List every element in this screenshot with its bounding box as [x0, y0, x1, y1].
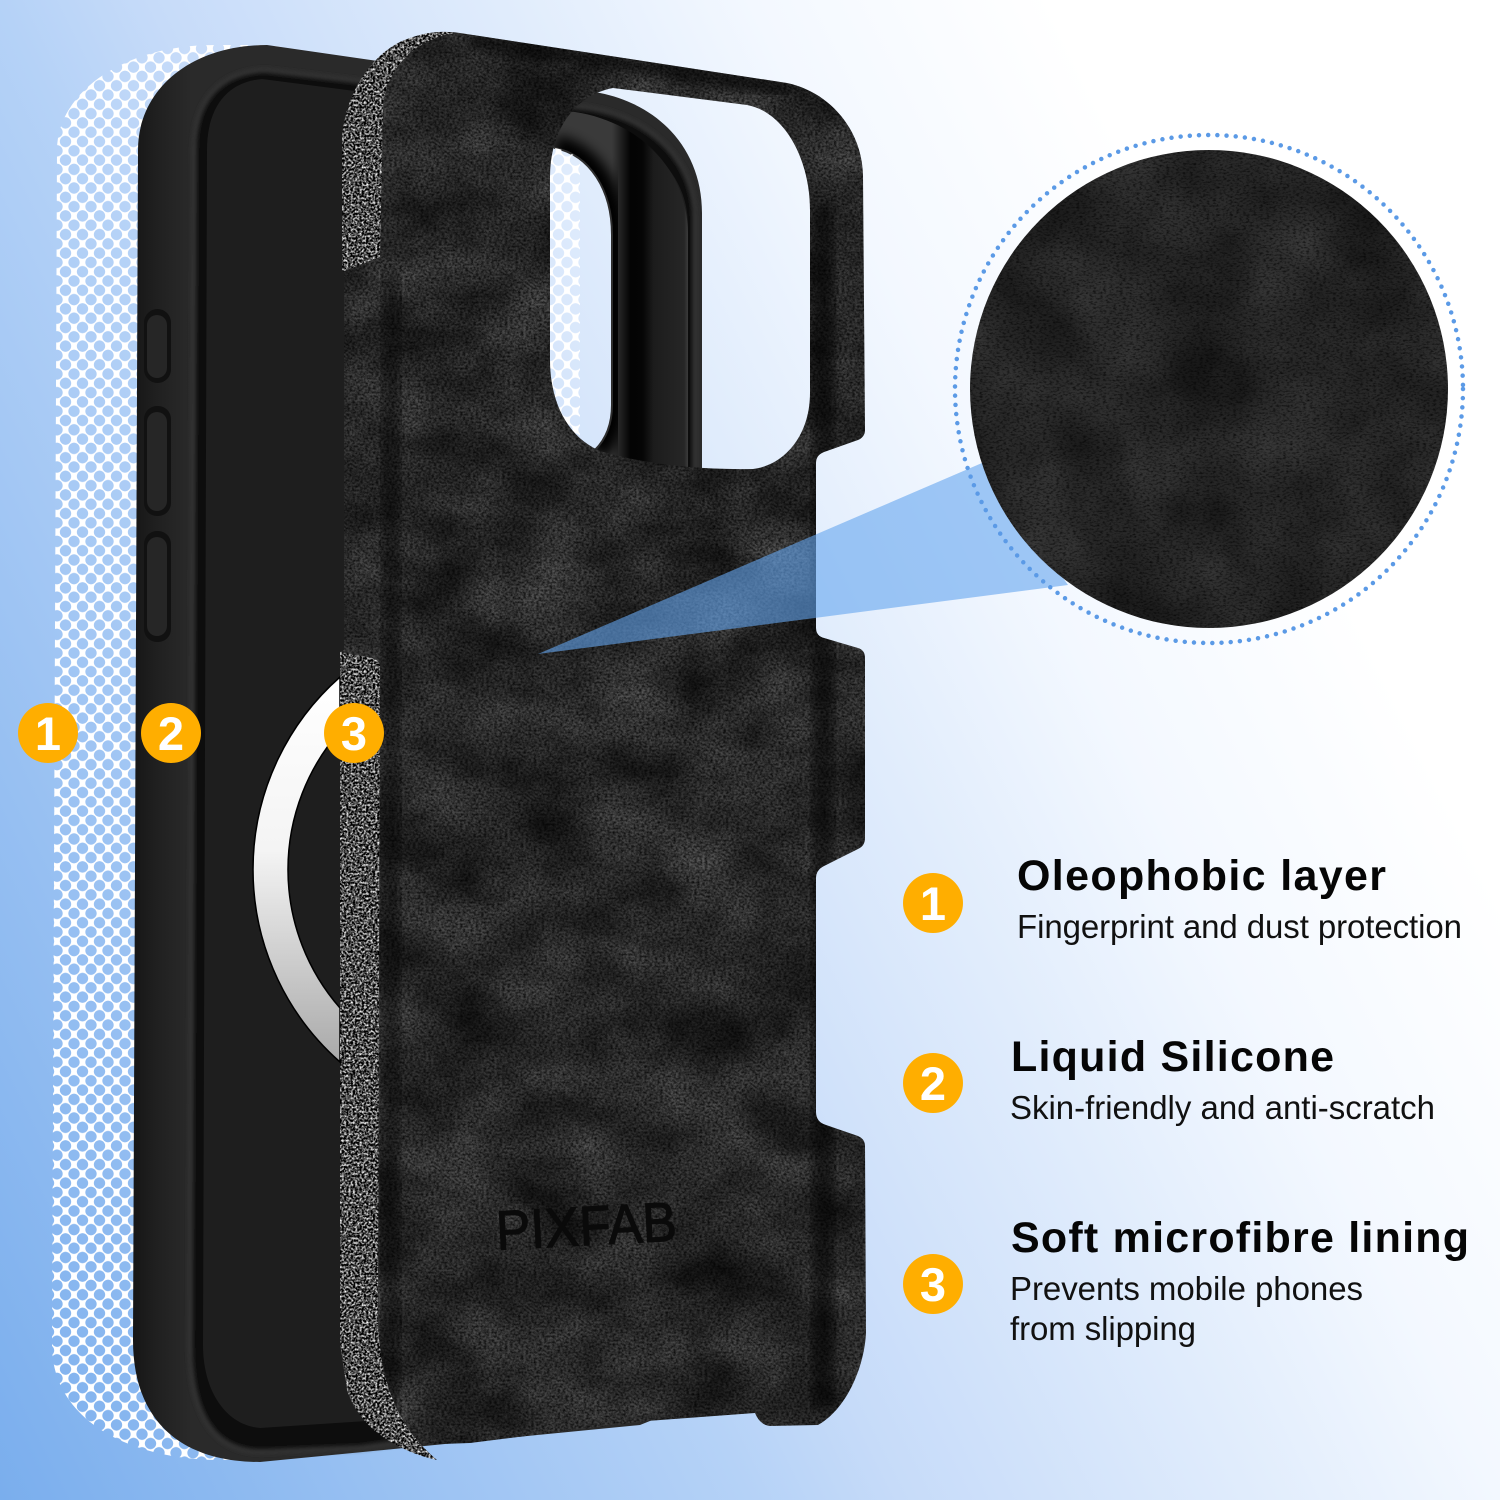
dotted ring	[955, 135, 1463, 643]
side button: volume up	[144, 406, 171, 516]
phone case: liquid silicone shell	[133, 45, 702, 1462]
halftone oleophobic layer	[52, 45, 580, 1460]
marker 2 on layer	[141, 703, 201, 763]
legend badge 2: 2	[920, 1057, 946, 1110]
legend item 2	[903, 1033, 1435, 1126]
dark shadow around camera window	[555, 148, 612, 450]
marker 1 on layer	[18, 703, 78, 763]
legend badge 3	[903, 1254, 963, 1314]
legend heading 3: Soft microfibre lining	[1011, 1214, 1469, 1262]
legend text 2: Skin-friendly and anti-scratch	[1010, 1089, 1435, 1126]
legend text 1: Fingerprint and dust protection	[1017, 908, 1462, 945]
legend heading 2: Liquid Silicone	[1011, 1033, 1334, 1081]
inner band of case behind opening	[530, 108, 688, 480]
legend text 3: from slipping	[1010, 1310, 1196, 1347]
microfibre lining	[340, 32, 866, 1460]
legend text 3	[1010, 1270, 1363, 1347]
callout beam	[538, 463, 1068, 654]
legend badge 1	[903, 873, 963, 933]
marker 1 on layer: 1	[35, 707, 61, 760]
lining cut edge, upper	[342, 32, 455, 272]
legend badge 3: 3	[920, 1258, 946, 1311]
lining cut edge, lower	[340, 652, 437, 1460]
side button: power	[144, 309, 171, 383]
camera window background	[530, 130, 612, 470]
legend badge 1: 1	[920, 877, 946, 930]
case inner panel	[203, 79, 688, 1428]
legend item 1	[903, 852, 1462, 945]
halftone through window	[550, 148, 580, 436]
case camera surround seen through the opening	[550, 112, 688, 467]
magsafe silver ring	[253, 677, 340, 1062]
legend item 3	[903, 1214, 1469, 1347]
legend text 3: Prevents mobile phones	[1010, 1270, 1363, 1307]
side button: volume down	[144, 531, 171, 642]
marker 3 on layer	[324, 703, 384, 763]
brand logo: PIXFAB	[494, 1190, 678, 1262]
case outer body	[133, 45, 702, 1462]
lining inner shading	[382, 40, 834, 1430]
marker 3 on layer: 3	[341, 707, 367, 760]
legend badge 2	[903, 1053, 963, 1113]
case inner rim	[190, 70, 695, 1452]
lining body	[340, 32, 866, 1445]
magnified microfibre circle	[970, 150, 1448, 628]
legend heading 1: Oleophobic layer	[1017, 852, 1386, 900]
marker 2 on layer: 2	[158, 707, 184, 760]
